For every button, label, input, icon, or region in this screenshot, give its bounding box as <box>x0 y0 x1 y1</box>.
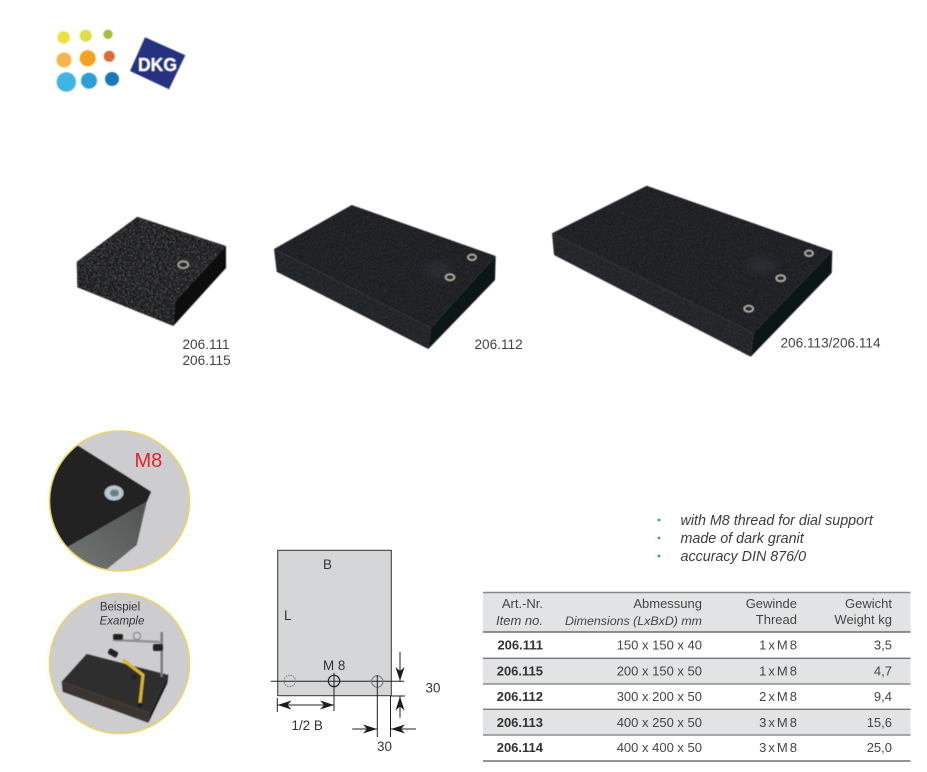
feature list: with M8 thread for dial support <box>680 513 874 529</box>
label: Beispiel / Example <box>100 602 144 628</box>
table row: 206.114 <box>497 740 892 755</box>
table row: 206.114: 3 x M 8 <box>759 740 797 755</box>
table row: 206.114: 25,0 <box>867 740 892 755</box>
table row: 206.113: 15,6 <box>867 715 892 730</box>
table header: Gewicht <box>845 596 892 611</box>
label: 206.111 / 206.115 <box>182 337 231 368</box>
photo: small granite plate <box>77 217 226 326</box>
label: M8: M8 <box>134 450 162 472</box>
table row: 206.115: 1 x M 8 <box>759 664 797 678</box>
label: 206.111 / 206.115: 206.115 <box>182 353 231 368</box>
logo: DKG <box>56 30 185 92</box>
table header <box>496 596 892 628</box>
table row: 206.112: 206.112 <box>497 689 543 704</box>
label: Beispiel / Example: Beispiel <box>100 602 140 614</box>
table row: 206.113: 206.113 <box>497 715 543 730</box>
logo: DKG: DKG <box>138 55 177 75</box>
table row: 206.114: 400 x 400 x 50 <box>617 740 702 755</box>
table row: 206.111: 1 x M 8 <box>759 638 797 652</box>
technical drawing: L <box>284 608 291 623</box>
feature list: made of dark granit <box>680 531 805 547</box>
table row: 206.111: 3,5 <box>874 638 892 652</box>
table header: Item no. <box>496 613 543 628</box>
table header: Abmessung <box>633 596 702 611</box>
feature list: accuracy DIN 876/0 <box>680 549 806 565</box>
technical drawing: 30 <box>426 680 440 696</box>
table row: 206.113: 3 x M 8 <box>759 715 797 730</box>
table row: 206.113: 400 x 250 x 50 <box>617 715 702 730</box>
technical drawing: M 8 <box>323 658 345 673</box>
specification table <box>483 592 910 761</box>
table row: 206.111: 150 x 150 x 40 <box>617 638 702 652</box>
label: Beispiel / Example: Example <box>100 616 144 628</box>
technical drawing <box>271 550 440 754</box>
table row: 206.112: 9,4 <box>874 689 892 704</box>
table row: 206.115: 200 x 150 x 50 <box>617 664 702 678</box>
photo: large granite plate <box>552 186 832 357</box>
circle: M8 thread detail <box>40 431 190 580</box>
table row: 206.111: 206.111 <box>497 638 543 652</box>
technical drawing: 30 <box>377 739 392 754</box>
table row: 206.115: 206.115 <box>497 664 543 678</box>
table header: Thread <box>756 612 797 627</box>
table header: Gewinde <box>746 596 797 611</box>
technical drawing: 1/2 B <box>292 718 323 733</box>
table row: 206.112 <box>497 689 892 704</box>
table row: 206.115: 4,7 <box>874 664 892 678</box>
table header: Art.-Nr. <box>502 596 543 611</box>
table row: 206.115 <box>497 664 892 678</box>
table row: 206.112: 300 x 200 x 50 <box>617 689 702 704</box>
label: 206.113/206.114: 206.113/206.114 <box>780 336 881 350</box>
table header: Weight kg <box>834 612 892 627</box>
label: 206.112: 206.112 <box>474 337 523 352</box>
feature list <box>658 513 874 565</box>
photo: plate with dial stand <box>62 632 168 723</box>
photo: medium granite plate <box>274 205 496 349</box>
table row: 206.111 <box>497 638 892 652</box>
table header: Dimensions (LxBxD) mm <box>565 614 702 628</box>
label: 206.111 / 206.115: 206.111 <box>182 337 230 352</box>
technical drawing: B <box>323 557 332 572</box>
table row: 206.113 <box>497 715 892 730</box>
table row: 206.112: 2 x M 8 <box>759 689 797 704</box>
table row: 206.114: 206.114 <box>497 740 544 755</box>
circle: usage example <box>50 594 190 734</box>
